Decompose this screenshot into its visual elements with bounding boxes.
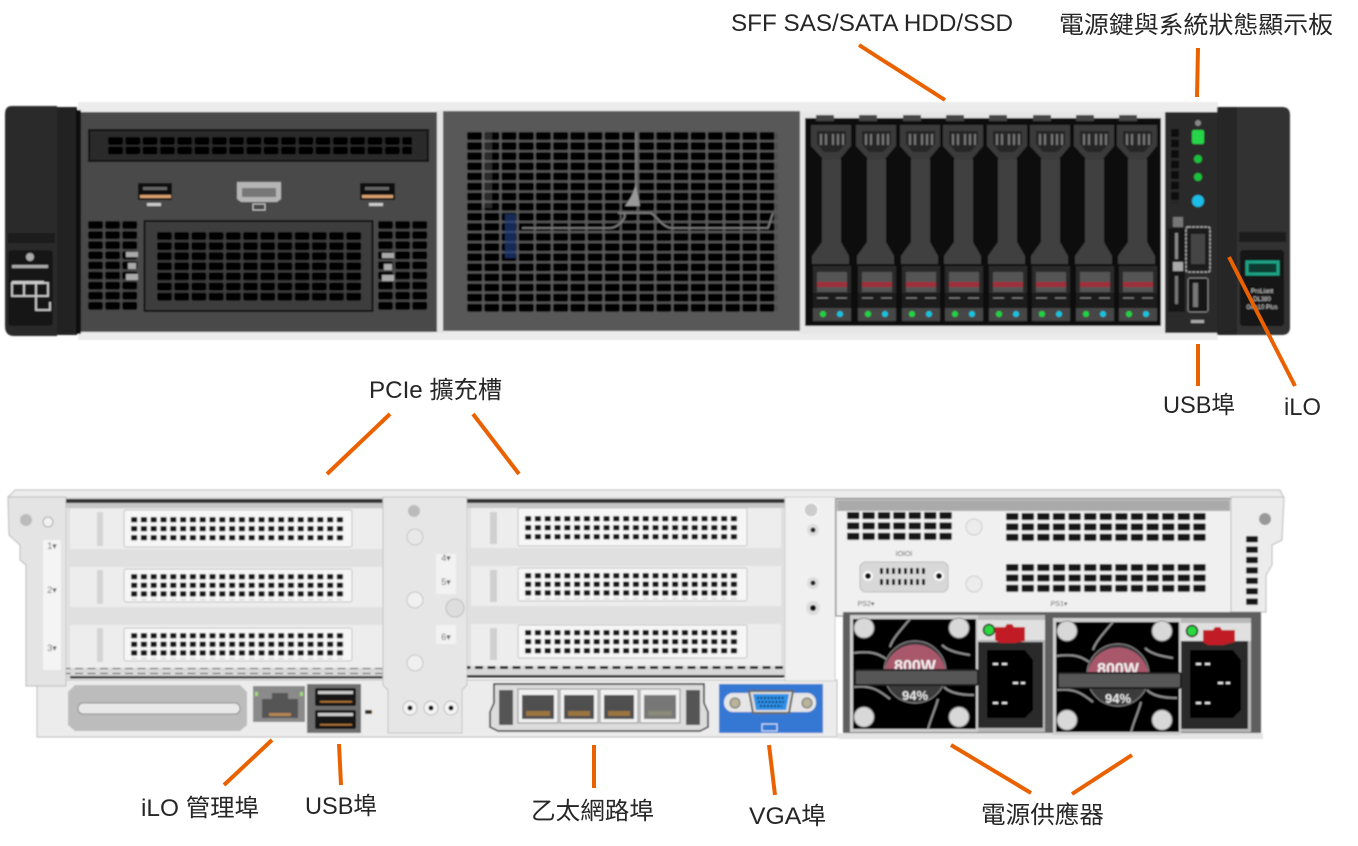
server rear view bbox=[8, 490, 1284, 739]
inlet area bbox=[1181, 618, 1251, 732]
right narrow bracket bbox=[785, 497, 835, 681]
leader line: VGA bbox=[769, 745, 775, 795]
drive 6 bbox=[1029, 125, 1072, 323]
top and bottom chassis strip bbox=[78, 102, 1218, 340]
red release latch bbox=[995, 624, 1025, 643]
handle bbox=[855, 670, 978, 685]
blank plate bbox=[68, 685, 247, 731]
vent clips bbox=[126, 252, 394, 281]
rear jacks bbox=[403, 701, 458, 715]
status LED bbox=[984, 624, 994, 636]
label: Ethernet port: 乙太網路埠 bbox=[531, 798, 654, 825]
product name: ProLiant bbox=[1251, 289, 1274, 295]
hub efficiency: 94% bbox=[902, 688, 928, 703]
front USB port left bbox=[138, 183, 172, 206]
right ear bbox=[1217, 107, 1290, 335]
fan bbox=[1053, 618, 1181, 735]
side slot bbox=[1168, 228, 1185, 312]
drive bay labels bbox=[816, 115, 1137, 121]
PS1 label: PS1▾ bbox=[1051, 601, 1068, 608]
leader line: drives bbox=[859, 45, 945, 100]
slot 1 plate bbox=[124, 510, 352, 547]
label: power supplies: 電源供應器 bbox=[981, 802, 1104, 829]
leader line: iLO bbox=[1229, 257, 1295, 386]
hub wattage: 800W bbox=[1097, 661, 1140, 678]
power button LED bbox=[1192, 130, 1204, 144]
right side vent bbox=[378, 221, 428, 311]
right bracket bbox=[1231, 497, 1284, 612]
leader line: power panel bbox=[1197, 48, 1198, 97]
upper rear plate with vents bbox=[836, 499, 1231, 616]
serial label: IOIOI bbox=[896, 551, 912, 558]
drive bay bbox=[800, 112, 1165, 334]
label: iLO: iLO bbox=[1284, 394, 1321, 421]
power supply 1 bbox=[1053, 618, 1251, 735]
control panel bbox=[1165, 112, 1217, 333]
leader line: iLO management bbox=[224, 740, 272, 785]
slot number 1: 1▾ bbox=[47, 541, 57, 551]
leader line: power supply right bbox=[1072, 755, 1132, 794]
Ethernet card bbox=[490, 684, 708, 731]
serial connector bbox=[860, 562, 948, 592]
left bracket bbox=[8, 497, 66, 686]
label: rear USB: USB埠 bbox=[305, 793, 377, 820]
iLO port bbox=[1173, 217, 1210, 272]
drive 8 bbox=[1116, 125, 1159, 323]
slot 3 plate bbox=[124, 628, 352, 661]
hub efficiency: 94% bbox=[1105, 691, 1131, 706]
hub wattage: 800W bbox=[894, 658, 937, 675]
label: iLO management port: iLO 管理埠 bbox=[141, 795, 259, 822]
drive 1 bbox=[810, 125, 853, 323]
top bezel vent bbox=[89, 130, 428, 161]
port 4 bbox=[640, 689, 680, 723]
VGA port bbox=[719, 684, 823, 733]
drive 4 bbox=[942, 125, 985, 323]
drive 3 bbox=[899, 125, 942, 323]
drive 5 bbox=[986, 125, 1029, 323]
leader line: front USB bbox=[1196, 344, 1200, 386]
middle grille panel bbox=[443, 111, 800, 331]
leader line: Ethernet bbox=[592, 745, 596, 788]
slot number 4: 4▾ bbox=[441, 553, 451, 563]
panel divider bbox=[437, 110, 443, 333]
left ear bbox=[5, 106, 81, 336]
slot 2 plate bbox=[124, 569, 352, 602]
leader line: PCIe left bbox=[327, 414, 390, 474]
PCIe slots left cage bbox=[66, 499, 383, 679]
rear USB ports bbox=[307, 684, 372, 733]
red release latch bbox=[1203, 627, 1235, 645]
power supply 2 bbox=[850, 615, 1045, 732]
front USB port bbox=[1188, 278, 1208, 323]
left side vent bbox=[88, 221, 138, 311]
port 1 bbox=[518, 689, 558, 723]
label: PCIe expansion slots: PCIe 擴充槽 bbox=[369, 377, 502, 404]
front USB port right bbox=[360, 183, 395, 206]
slot number 5: 5▾ bbox=[441, 577, 451, 587]
slot number 3: 3▾ bbox=[47, 643, 57, 653]
fan bbox=[850, 615, 978, 732]
power supply bay bbox=[843, 612, 1261, 734]
label: power and status panel: 電源鍵與系統狀態顯示板 bbox=[1059, 12, 1333, 39]
middle bracket bbox=[383, 497, 467, 733]
leader line: power supply left bbox=[951, 745, 1031, 793]
leader line: PCIe right bbox=[473, 414, 519, 474]
status display holes bbox=[1171, 129, 1179, 203]
status LED bbox=[1186, 626, 1198, 636]
slot 5 plate bbox=[518, 568, 747, 601]
slot number 2: 2▾ bbox=[47, 585, 57, 595]
product name: DL380 bbox=[1253, 297, 1272, 303]
rear lower strip bbox=[37, 680, 837, 737]
left front panel bbox=[81, 112, 437, 332]
product name: Gen10 Plus bbox=[1246, 305, 1278, 311]
HPE logo bbox=[1247, 262, 1278, 274]
slot 4 plate bbox=[518, 508, 747, 546]
chassis top edge bbox=[8, 490, 1284, 498]
inlet area bbox=[978, 615, 1045, 732]
port 2 bbox=[560, 689, 598, 723]
drive 2 bbox=[855, 125, 898, 323]
PS2 label: PS2▾ bbox=[858, 601, 875, 608]
server front view bbox=[5, 102, 1290, 340]
drive 7 bbox=[1073, 125, 1116, 323]
label: SFF SAS/SATA HDD/SSD: SFF SAS/SATA HDD/SSD bbox=[731, 10, 1013, 37]
leader line: rear USB bbox=[339, 744, 341, 785]
label: VGA port: VGA埠 bbox=[749, 803, 826, 830]
label: front USB: USB埠 bbox=[1163, 392, 1235, 419]
slot 6 plate bbox=[518, 625, 747, 658]
slot number 6: 6▾ bbox=[441, 632, 451, 642]
port 3 bbox=[600, 689, 638, 723]
centre vent plate bbox=[144, 221, 372, 311]
front display port bbox=[237, 182, 281, 210]
status LEDs bbox=[1192, 120, 1204, 207]
PCIe slots right cage bbox=[467, 499, 785, 678]
handle bbox=[1058, 673, 1181, 688]
iLO management port bbox=[253, 686, 305, 722]
